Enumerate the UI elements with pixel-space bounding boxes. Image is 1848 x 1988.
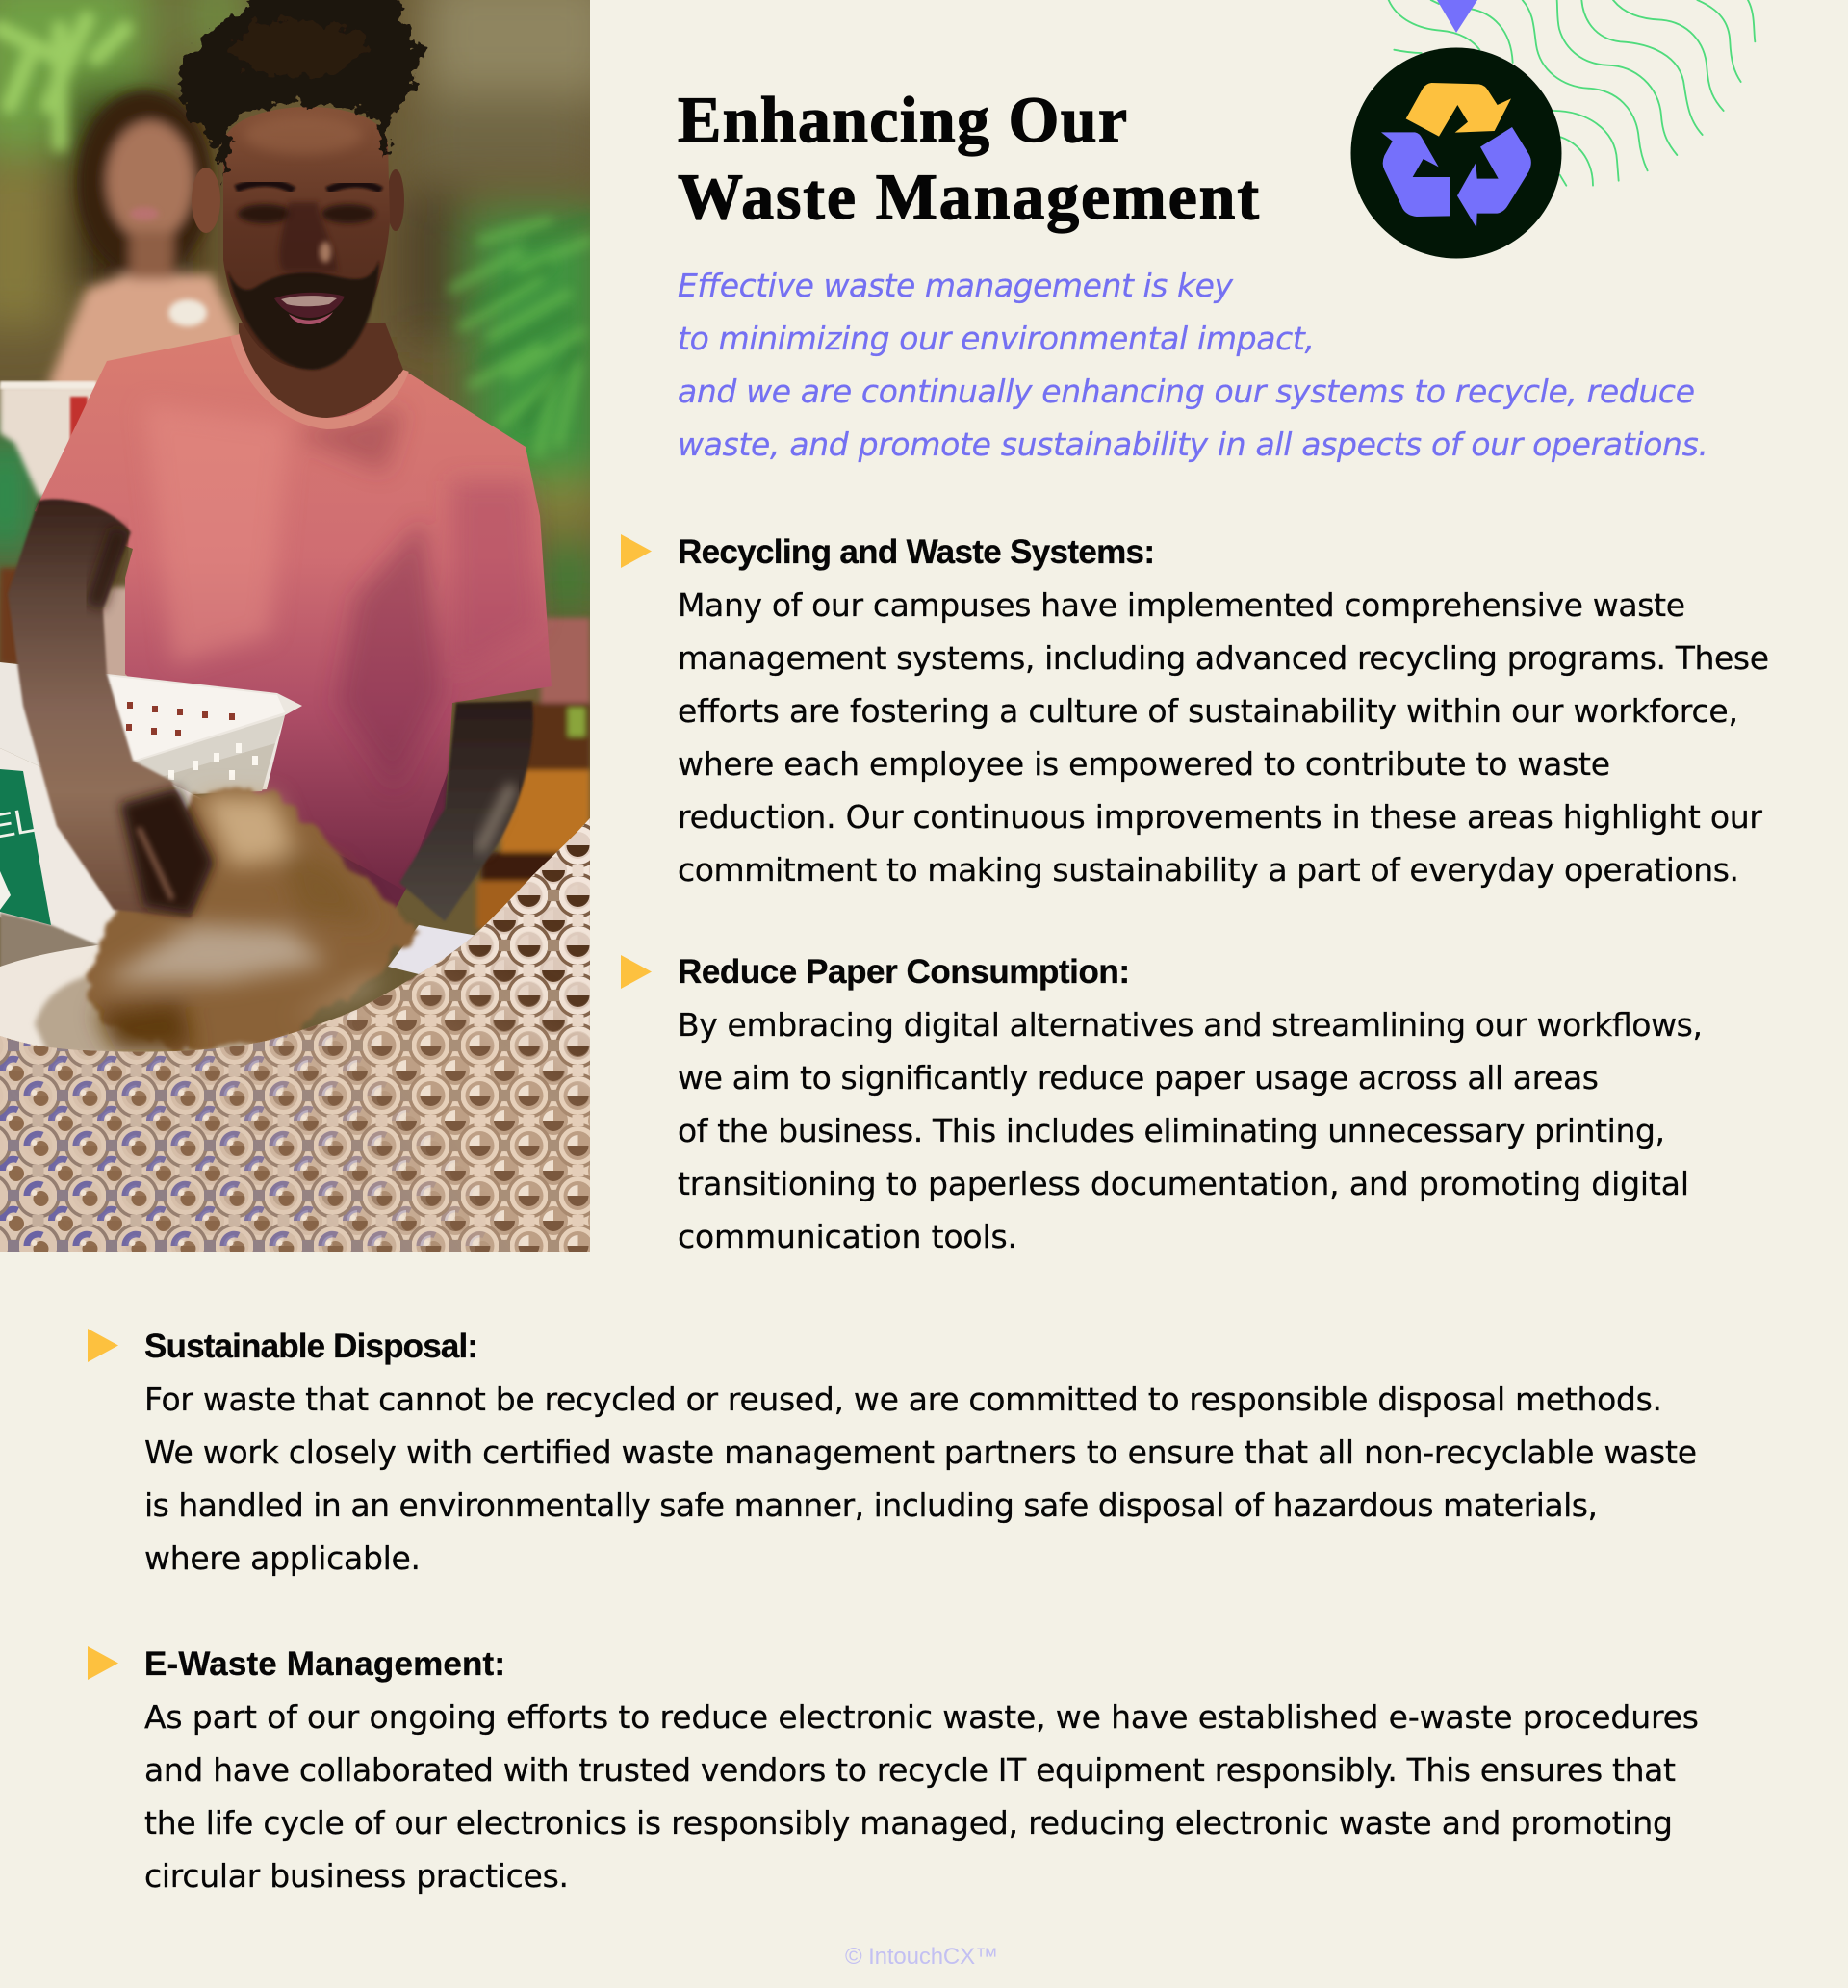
section: e-waste management: [88, 1645, 1699, 1895]
white tub: [0, 925, 483, 1054]
title: [678, 83, 1259, 233]
body text: sustainable disposal: where applicable.: [144, 1539, 421, 1577]
body text: reduce paper consumption: [678, 1006, 1703, 1255]
body text: recycling and waste systems: management systems, including advanced recycling programs. These: [678, 639, 1769, 677]
body text: recycling and waste systems: reduction. Our continuous improvements in these areas highlight our: [678, 798, 1762, 836]
photo background foliage: [0, 0, 616, 1059]
intro text: Effective waste management is key: [678, 267, 1233, 304]
section: sustainable disposal: [88, 1328, 1697, 1577]
heading: e-waste management: E-Waste Management:: [144, 1645, 505, 1683]
man: shirt: [35, 335, 552, 910]
body text: e-waste management: [144, 1698, 1699, 1895]
blurred woman in background: [0, 90, 241, 505]
body text: reduce paper consumption: By embracing digital alternatives and streamlining our workflows,: [678, 1006, 1703, 1044]
icon: yellow arrow bullet: [88, 1329, 118, 1362]
man: head: [180, 0, 424, 370]
section: recycling and waste systems: [621, 533, 1769, 889]
heading: recycling and waste systems: Recycling and Waste Systems:: [678, 533, 1155, 571]
footer copyright: © IntouchCX™: [845, 1944, 998, 1970]
intro text: and we are continually enhancing our systems to recycle, reduce: [678, 373, 1695, 410]
man: left arm and hand: [8, 499, 214, 917]
body text: reduce paper consumption: communication tools.: [678, 1218, 1017, 1255]
crumpled paper bag: [84, 787, 419, 1049]
icon: recycling symbol in dark circle: [1351, 48, 1561, 258]
green sign on basket: [0, 769, 51, 925]
body text: recycling and waste systems: Many of our campuses have implemented comprehensive waste: [678, 586, 1685, 624]
icon: yellow arrow bullet: [88, 1646, 118, 1680]
laundry basket: [0, 662, 302, 970]
section: reduce paper consumption: [621, 953, 1703, 1255]
body text: e-waste management: the life cycle of our electronics is responsibly managed, reducing electronic waste and promoting: [144, 1804, 1673, 1842]
body text: reduce paper consumption: we aim to significantly reduce paper usage across all areas: [678, 1059, 1599, 1097]
heading: reduce paper consumption: Reduce Paper Consumption:: [678, 953, 1130, 991]
body text: sustainable disposal: [144, 1381, 1697, 1577]
intro text: [678, 267, 1708, 463]
man: curly hair: [180, 0, 424, 183]
icon: yellow arrow bullet: [621, 534, 652, 568]
man: neck: [239, 323, 403, 418]
body text: recycling and waste systems: commitment to making sustainability a part of everyday operations.: [678, 851, 1739, 889]
man: eyes and nose: [236, 183, 381, 271]
man: right arm: [399, 701, 533, 921]
intro text: to minimizing our environmental impact,: [678, 320, 1315, 357]
body text: e-waste management: circular business practices.: [144, 1857, 569, 1895]
body text: reduce paper consumption: of the business. This includes eliminating unnecessary printing,: [678, 1112, 1665, 1149]
body text: recycling and waste systems: [678, 586, 1769, 889]
title: Waste Management: [678, 160, 1259, 233]
body text: reduce paper consumption: transitioning to paperless documentation, and promoting digital: [678, 1165, 1689, 1202]
icon: yellow arrow bullet: [621, 955, 652, 989]
pale bench behind arm: [102, 583, 127, 676]
geometric dimple pattern overlay: [0, 818, 590, 1252]
man: beard and mouth: [227, 260, 379, 370]
intro text: waste, and promote sustainability in all aspects of our operations.: [678, 426, 1708, 463]
body text: recycling and waste systems: efforts are fostering a culture of sustainability within our workforce,: [678, 692, 1738, 730]
body text: e-waste management: As part of our ongoing efforts to reduce electronic waste, we have established e-waste procedures: [144, 1698, 1699, 1736]
icon: purple map-pin triangle: [1437, 0, 1477, 33]
heading: sustainable disposal: Sustainable Disposal:: [144, 1328, 478, 1365]
body text: recycling and waste systems: where each employee is empowered to contribute to waste: [678, 745, 1610, 783]
body text: sustainable disposal: is handled in an environmentally safe manner, including safe disposal of hazardous materials,: [144, 1486, 1598, 1524]
body text: sustainable disposal: For waste that cannot be recycled or reused, we are committed to responsible disposal methods.: [144, 1381, 1662, 1418]
panel: photo of man sorting waste: [0, 0, 616, 1252]
decorative green wavy lines: [1389, 0, 1755, 186]
right-hand wooden background: [476, 618, 590, 929]
body text: sustainable disposal: We work closely with certified waste management partners to ensure that all non-recyclable waste: [144, 1433, 1697, 1471]
body text: e-waste management: and have collaborated with trusted vendors to recycle IT equipment responsibly. This ensures that: [144, 1751, 1676, 1789]
title: Enhancing Our: [678, 83, 1127, 156]
